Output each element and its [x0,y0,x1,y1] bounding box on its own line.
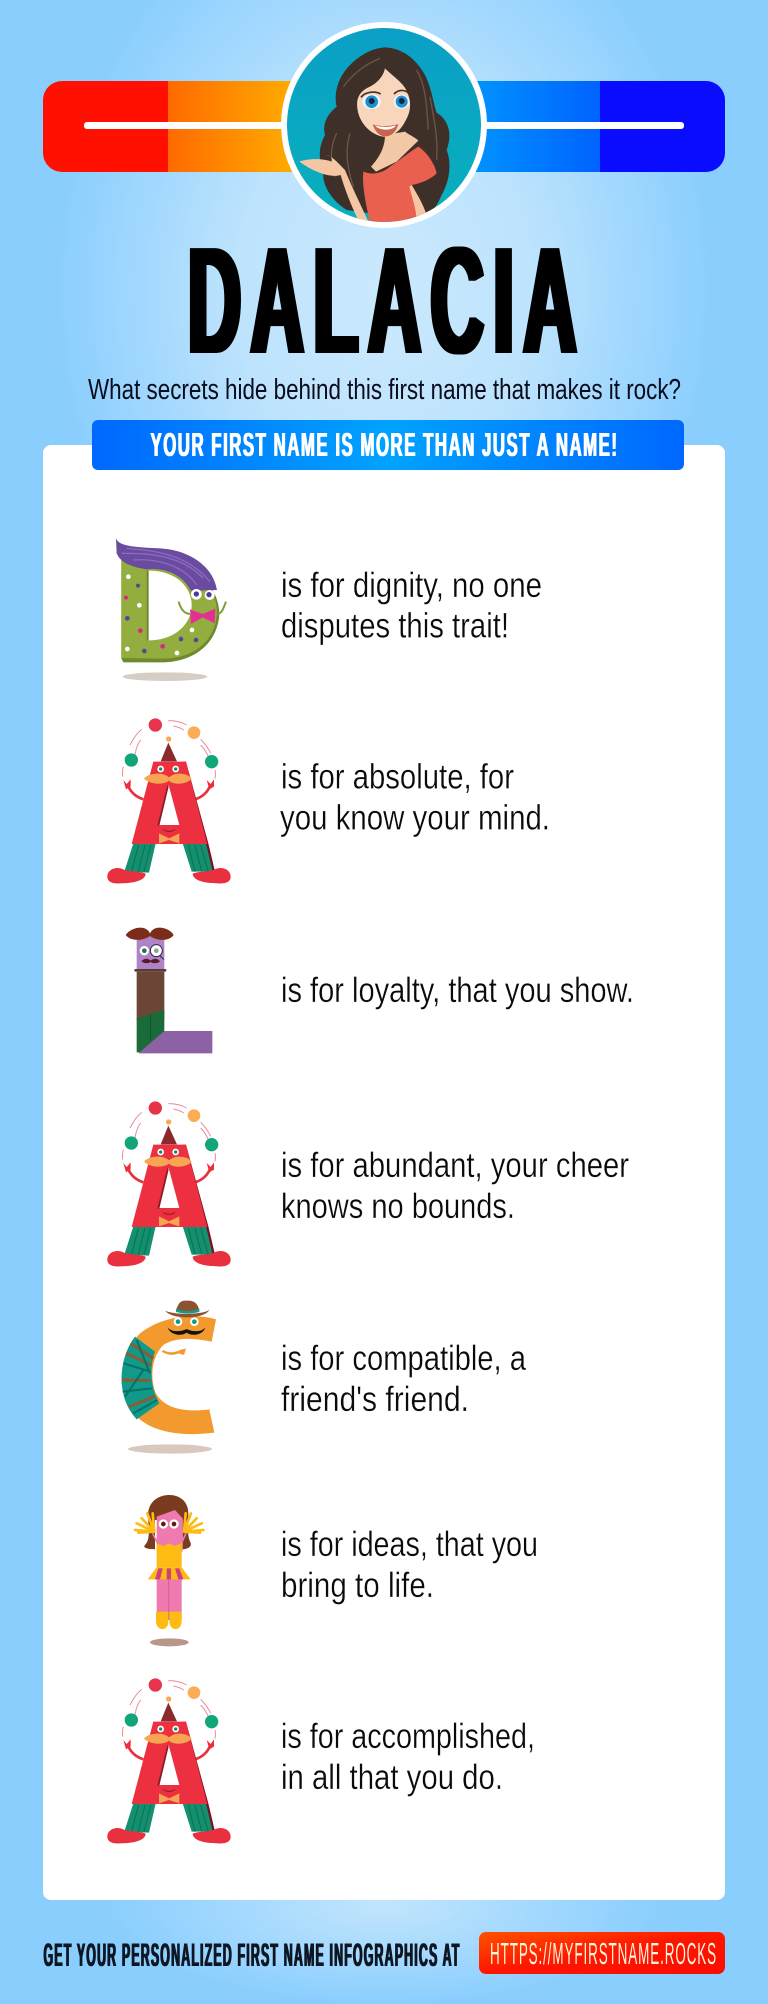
row A2 text: knows no bounds. [281,1186,515,1226]
face [357,68,410,137]
letter D character [116,538,226,681]
letter C character [122,1301,216,1454]
white panel [43,445,725,1900]
letter L character [126,928,212,1053]
row I text: is for ideas, that you [281,1524,538,1564]
hair [320,47,449,220]
row C text [281,1338,526,1419]
row D text: disputes this trait! [281,606,509,646]
row C text: friend's friend. [281,1379,469,1419]
row C text: is for compatible, a [281,1338,526,1378]
avatar: woman in circle [281,22,487,228]
row A1 text: you know your mind. [280,798,550,838]
mouth [373,124,398,136]
banner [92,420,684,470]
letter A character 3 [107,1678,231,1843]
neck [371,132,418,172]
row A1 text [280,756,550,838]
letter A character 1 [107,718,231,883]
row A3 text: in all that you do. [281,1757,503,1797]
letter I character [135,1495,203,1646]
arms [299,155,368,222]
title: DALACIA [188,217,586,386]
shirt [363,147,437,223]
letter A character 2 [107,1101,231,1266]
eyes [362,94,381,109]
row I text [281,1524,538,1605]
row A3 text: is for accomplished, [281,1716,535,1756]
row D text: is for dignity, no one [281,565,542,605]
row A2 text [281,1145,629,1226]
row I text: bring to life. [281,1565,434,1605]
row A3 text [281,1716,535,1797]
row L text: is for loyalty, that you show. [281,970,634,1010]
header colour bar [43,81,725,172]
row A2 text: is for abundant, your cheer [281,1145,629,1185]
footer url button [479,1932,725,1974]
row D text [281,565,542,646]
row A1 text: is for absolute, for [281,756,514,796]
